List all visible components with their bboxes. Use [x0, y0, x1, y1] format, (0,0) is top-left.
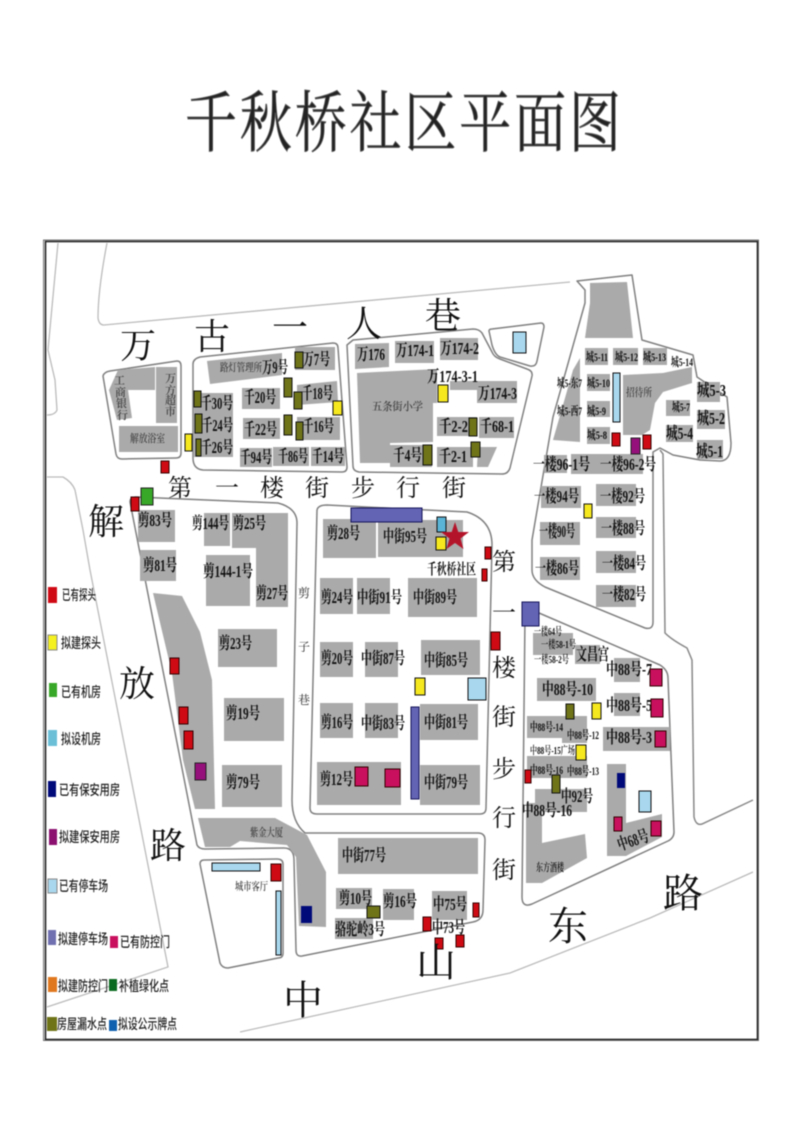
building labels: 城5-7 [672, 399, 690, 414]
building labels: 剪83号 [138, 511, 172, 530]
building labels [357, 339, 517, 466]
block: central street [310, 505, 492, 814]
buildings [355, 338, 517, 467]
legend item: existing access door: 已有防控门 [120, 934, 170, 950]
block outline [130, 497, 485, 956]
block: bank and supermarket [103, 361, 181, 459]
building labels: 中街89号 [413, 587, 457, 607]
building labels: 剪144号 [192, 514, 229, 533]
building labels [533, 349, 726, 604]
building labels: 一楼96-1号 [533, 454, 590, 474]
building labels: 一楼84号 [602, 553, 646, 573]
building labels: 一楼94号 [534, 486, 579, 506]
legend [47, 587, 177, 1032]
legend item: planned security room: 拟建保安用房 [59, 829, 120, 845]
building labels: 中88号-3 [606, 728, 652, 747]
legend item: greening point [109, 978, 169, 994]
building labels: 城5-14 [671, 354, 693, 369]
building labels: 中街83号 [361, 713, 405, 733]
building labels [522, 624, 652, 874]
building labels: 万174-2 [440, 339, 479, 358]
building labels: 五条街小学 [372, 399, 423, 413]
building labels: 城5-12 [615, 349, 638, 364]
building labels: 一楼90号 [539, 521, 575, 541]
markers: roof leak points and proposed probes [185, 352, 342, 456]
road name: 解放路: 解放路 [88, 502, 186, 866]
building labels: 一楼92号 [600, 486, 645, 506]
legend item: notice board point: 拟设公示牌点 [118, 1016, 177, 1032]
icon: community star [441, 522, 469, 549]
building labels: 中75号 [433, 895, 467, 914]
building labels: 一楼82号 [602, 584, 646, 604]
buildings [138, 510, 478, 939]
building labels: 万7号 [303, 350, 330, 369]
legend item: planned security room [49, 829, 120, 845]
road name: 第一楼街步行街 vertical: 第一楼街步行街 [492, 549, 517, 884]
building labels: 剪19号 [226, 704, 260, 723]
legend item: roof leak point: 房屋漏水点 [57, 1016, 107, 1032]
building labels: 路灯管理所 [220, 360, 262, 374]
building labels: 中街77号 [342, 845, 386, 865]
building labels: 中88号-7 [606, 660, 652, 679]
building labels: 万174-3 [478, 384, 517, 403]
markers [423, 385, 480, 465]
legend item: notice board point [109, 1016, 177, 1032]
building labels: 千20号 [244, 388, 276, 407]
legend item: roof leak point [47, 1016, 107, 1032]
building labels: 城5-西7 [557, 403, 582, 418]
building labels: 万174-1 [396, 341, 434, 360]
icon: existing parking [513, 332, 526, 353]
building labels: 万174-3-1 [427, 367, 478, 386]
building labels: 中街79号 [424, 772, 468, 792]
buildings [194, 347, 345, 467]
title: 千秋桥社区平面图 [185, 87, 621, 160]
legend item: existing security room: 已有保安用房 [59, 782, 120, 798]
building labels: 剪16号 [383, 892, 417, 911]
proposed parking at corner [522, 602, 539, 626]
building labels: 千4号 [393, 446, 422, 465]
block outline [532, 275, 731, 628]
building labels: 剪10号 [339, 889, 372, 908]
building labels: 中88号-15广场 [530, 743, 575, 757]
building labels: 一楼64号 [534, 624, 562, 638]
building labels: 招待所 [626, 385, 652, 399]
building labels: 剪27号 [256, 584, 288, 603]
building labels [138, 511, 467, 939]
block outline [310, 505, 492, 814]
building labels [114, 372, 176, 445]
building labels: 中88号-13 [567, 763, 599, 778]
building labels: 一楼58-2号 [534, 652, 569, 666]
building labels: 城5-8 [587, 427, 607, 442]
road name: 万古一人巷: 万古一人巷 [120, 296, 461, 366]
legend item: planned probe [48, 635, 101, 651]
block: small parking lot [489, 323, 544, 366]
building labels: 中街85号 [424, 650, 468, 670]
road name: 中山东路: 中山东路 [283, 871, 703, 1023]
legend item: planned access door [48, 977, 108, 994]
legend item: existing machine room: 已有机房 [61, 684, 101, 700]
legend item: planned parking [48, 930, 108, 947]
building labels: 千秋桥社区 [427, 560, 476, 578]
markers [525, 669, 666, 836]
building labels: 中街81号 [424, 712, 468, 732]
legend item: existing security room [48, 781, 120, 798]
legend item: planned access door: 拟建防控门 [58, 978, 108, 994]
block outline [522, 613, 674, 905]
building labels [320, 524, 476, 792]
markers: west entrance [131, 461, 169, 511]
building labels: 剪25号 [233, 514, 266, 533]
building labels: 城5-13 [643, 349, 666, 364]
building labels: 中88号-16 [530, 762, 563, 777]
legend item: planned probe: 拟建探头 [61, 635, 101, 651]
block outline [103, 361, 181, 459]
markers [170, 658, 479, 949]
building labels: 中88号-12 [567, 727, 599, 742]
building labels: 文昌宫 [576, 644, 609, 664]
block outline [193, 343, 347, 472]
building labels: 剪20号 [321, 649, 353, 668]
building labels: 千22号 [244, 420, 277, 439]
building labels: 骆驼岭3号 [335, 919, 385, 939]
building labels: 城5-11 [586, 349, 608, 364]
building labels: 剪16号 [321, 713, 353, 732]
building labels: 剪12号 [320, 770, 353, 789]
label: 城市客厅 [235, 879, 268, 893]
building labels: 一楼88号 [601, 518, 645, 538]
markers: along first building street [482, 547, 500, 650]
legend item: existing access door [110, 934, 170, 950]
legend item: existing parking: 已有停车场 [59, 878, 108, 894]
block: city living room [200, 859, 283, 968]
building labels: 中88号-14 [530, 719, 563, 734]
block: jian west buildings [130, 497, 485, 956]
building labels: 剪23号 [219, 634, 252, 653]
building labels: 中街95号 [383, 526, 427, 546]
building labels: 中街87号 [361, 648, 405, 668]
legend item: existing parking [48, 878, 108, 894]
buildings [109, 367, 178, 452]
building labels: 工商银行 [114, 374, 128, 422]
block: wutiao street school [347, 329, 532, 474]
building labels: 千68-1 [480, 417, 514, 436]
building labels: 城5-10 [587, 375, 610, 390]
building labels: 城5-3 [697, 381, 726, 400]
building labels: 千94号 [240, 448, 272, 467]
building labels: 剪24号 [321, 588, 353, 607]
building labels: 千86号 [278, 447, 308, 466]
block outline [347, 329, 532, 474]
building labels: 千24号 [202, 416, 233, 435]
block: zhong 88 area [522, 602, 674, 905]
legend item: existing probe: 已有探头 [62, 587, 96, 603]
building labels: 中88号-5 [606, 696, 652, 715]
building labels: 万方超市 [165, 372, 176, 418]
parking strips and probe [212, 863, 281, 955]
building labels: 剪144-1号 [203, 562, 253, 581]
markers [351, 508, 486, 799]
building labels: 千2-1 [439, 447, 467, 466]
legend item: planned machine room [48, 730, 101, 747]
legend item: existing machine room [49, 683, 101, 700]
map frame [44, 240, 758, 1040]
road name: 剪子巷: 剪子巷 [298, 586, 310, 707]
building labels: 一楼96-2号 [600, 454, 656, 474]
building labels: 剪28号 [327, 524, 360, 543]
building labels: 千2-2 [439, 417, 468, 436]
legend item: planned machine room: 拟设机房 [61, 731, 101, 747]
legend item: planned parking: 拟建停车场 [58, 931, 108, 947]
buildings [317, 519, 480, 805]
legend item: greening point: 补植绿化点 [119, 978, 169, 994]
building labels: 中68号 [615, 826, 651, 854]
markers [584, 373, 651, 518]
building labels: 一楼58-1号 [541, 637, 576, 651]
building labels: 城5-9 [587, 403, 606, 418]
building labels: 中88号-16 [522, 801, 572, 820]
building labels: 城5-4 [666, 424, 693, 443]
block: chengwu and yilou buildings [532, 275, 731, 628]
building labels: 千16号 [303, 417, 334, 436]
building labels: 解放浴室 [130, 431, 165, 445]
building labels: 剪79号 [226, 773, 260, 792]
buildings [526, 633, 670, 883]
building labels: 剪81号 [143, 556, 177, 575]
building labels: 中73号 [432, 918, 465, 937]
building labels: 千26号 [201, 438, 233, 457]
building labels: 千30号 [201, 394, 233, 413]
building labels: 城5-2 [697, 409, 725, 428]
building labels: 中街91号 [357, 587, 402, 607]
road outlines [47, 243, 753, 1032]
building labels: 千14号 [312, 447, 344, 466]
road name: 第一楼街步行街 horizontal: 第一楼街步行街 [168, 475, 466, 502]
block: wangu buildings [185, 343, 347, 472]
building labels: 东方酒楼 [536, 860, 565, 874]
legend item: existing probe [48, 587, 96, 603]
building labels: 中88号-10 [542, 680, 593, 699]
building labels: 中92号 [561, 787, 593, 806]
building labels: 紫金大厦 [250, 825, 283, 839]
buildings [540, 282, 725, 607]
building labels: 万176 [357, 345, 385, 364]
building labels: 千18号 [302, 384, 333, 403]
building labels: 一楼86号 [535, 558, 579, 578]
building labels: 城5-东7 [557, 375, 582, 390]
building labels: 城5-1 [696, 442, 723, 461]
building labels: 万9号 [262, 358, 288, 377]
building labels [201, 350, 344, 467]
